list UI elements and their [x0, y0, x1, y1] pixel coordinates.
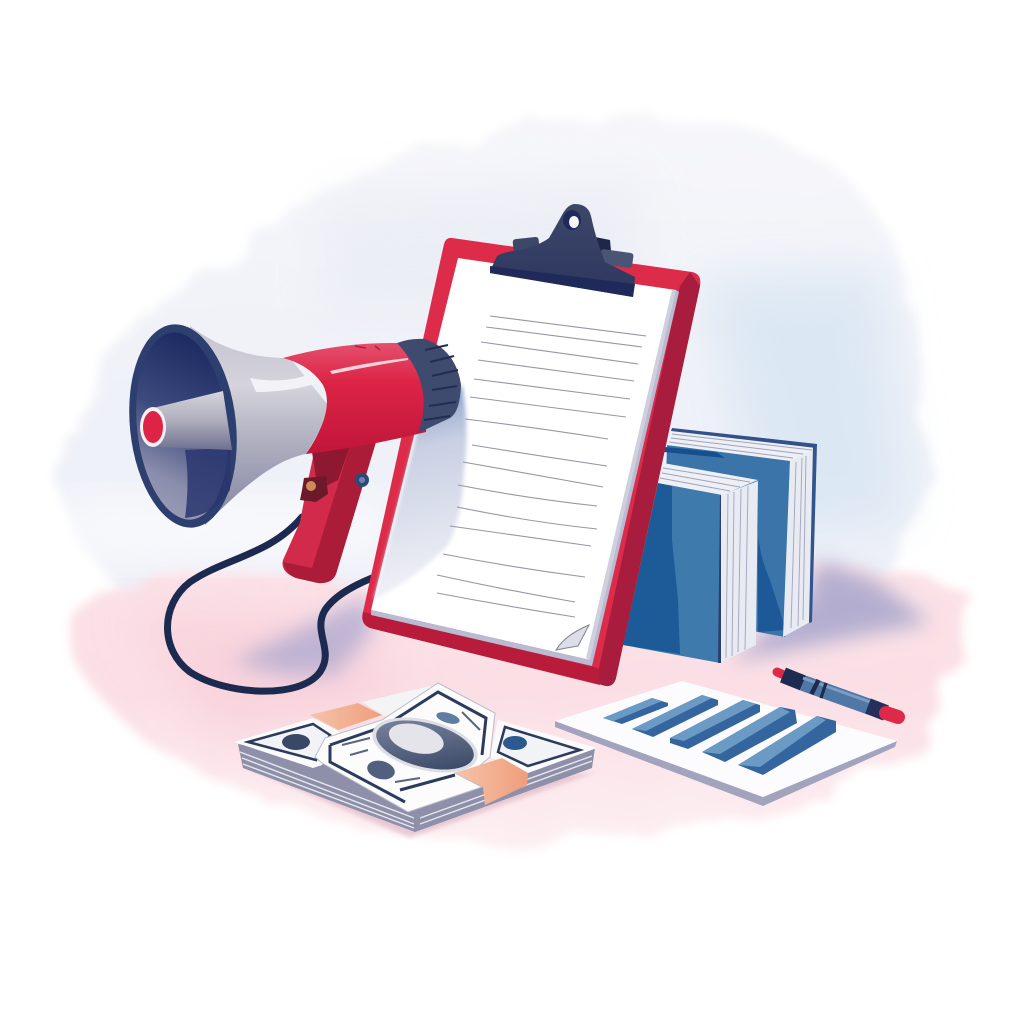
portrait: [367, 708, 483, 782]
icon: power cable: [168, 517, 372, 691]
dark throat below tube: [185, 448, 231, 518]
handle: [283, 442, 376, 583]
board: [362, 238, 700, 686]
back book: [662, 428, 817, 637]
clip: [490, 204, 635, 297]
body: [283, 343, 426, 454]
paper bands: [310, 703, 382, 730]
bar chart sheet: [555, 681, 897, 806]
page corner curl: [556, 625, 589, 650]
cash stack: [234, 683, 597, 832]
bell mouth: [120, 319, 246, 533]
crayon: [777, 672, 898, 717]
front book: [623, 463, 758, 663]
right bill: [490, 720, 597, 773]
left bill: [234, 718, 340, 768]
paper shading: [374, 385, 467, 600]
back top strip: [362, 686, 442, 716]
clipboard: [362, 204, 700, 686]
inner driver tube: [153, 391, 232, 450]
books: [623, 428, 817, 663]
text lines: [437, 316, 646, 617]
bars: [603, 695, 836, 775]
paper stack edge: [371, 290, 679, 666]
horn cone: [190, 326, 332, 525]
background wash: [60, 117, 975, 844]
shadow: floor shadows: [232, 560, 930, 838]
stack edge: [238, 744, 595, 832]
paper sheet: [371, 258, 676, 660]
rear ring: [397, 339, 461, 433]
front bill: [315, 683, 495, 812]
megaphone: [120, 319, 461, 583]
